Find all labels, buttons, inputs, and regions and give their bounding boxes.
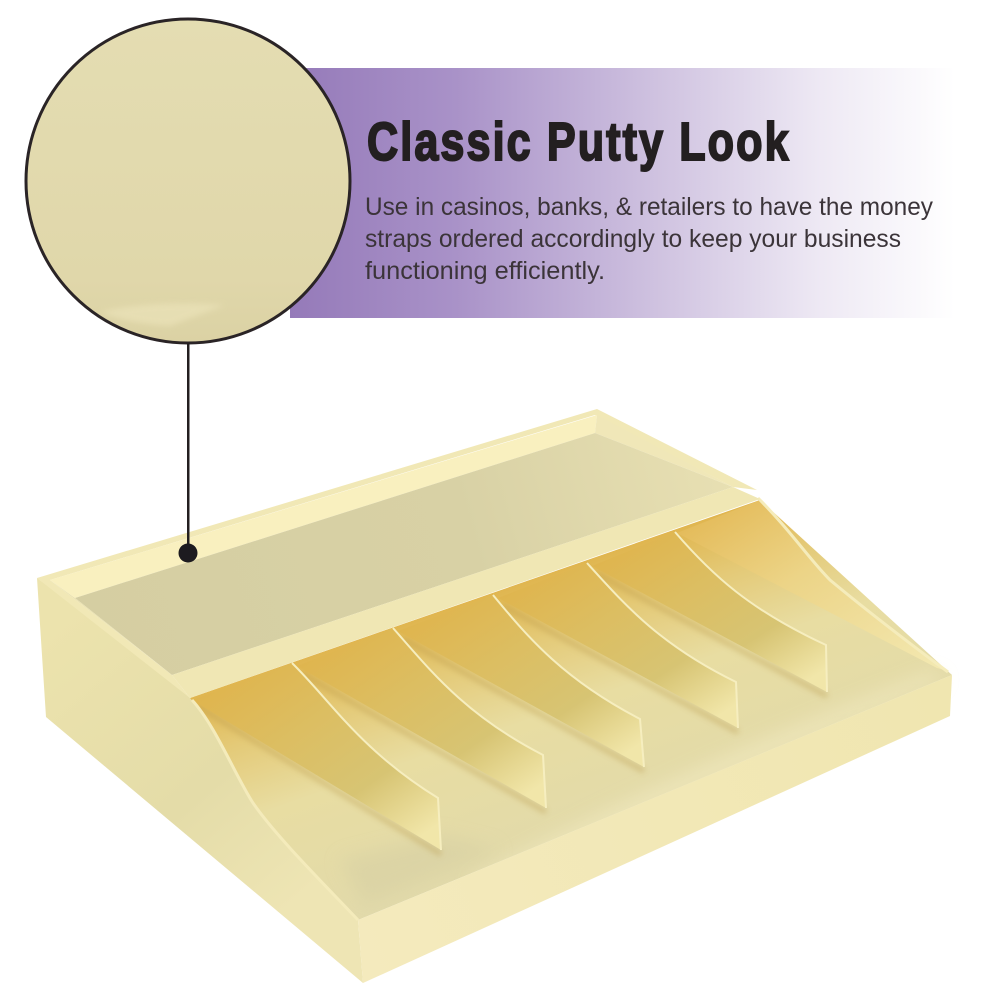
divider 2 edge bbox=[393, 628, 546, 808]
divider base shadows bbox=[197, 574, 827, 854]
description text: straps ordered accordingly to keep your business bbox=[365, 225, 901, 253]
description text: Use in casinos, banks, & retailers to have the money bbox=[365, 193, 933, 221]
divider 1 edge bbox=[292, 663, 441, 850]
shelf front strip bbox=[172, 487, 760, 698]
divider 2 bbox=[297, 628, 546, 808]
upper shelf right inner wall bbox=[595, 415, 733, 487]
product: putty money strap tray bbox=[37, 409, 952, 983]
description text bbox=[365, 193, 933, 285]
magnified texture circle bbox=[26, 19, 350, 343]
divider 5 bbox=[592, 532, 827, 692]
callout leader line with dot bbox=[178, 343, 198, 562]
top rim bbox=[37, 409, 757, 698]
tray floor bbox=[190, 500, 952, 920]
divider 4 bbox=[498, 563, 738, 728]
left side panel bbox=[37, 578, 363, 983]
divider 3 bbox=[398, 595, 644, 767]
divider 5 edge bbox=[675, 532, 827, 692]
left ramp edge highlight bbox=[192, 700, 358, 920]
purple gradient banner bbox=[290, 68, 955, 318]
upper shelf inner wall bbox=[50, 415, 597, 598]
divider 4 edge bbox=[587, 563, 738, 728]
right ramp wall bbox=[677, 500, 945, 670]
floor front-left shade bbox=[340, 835, 500, 905]
divider 1 bbox=[192, 663, 441, 850]
title: Classic Putty Look bbox=[367, 113, 789, 172]
upper shelf surface bbox=[75, 433, 733, 675]
front lip bbox=[358, 675, 952, 983]
left inner wall of shelf bbox=[50, 580, 172, 675]
divider 3 edge bbox=[493, 595, 644, 767]
description text: functioning efficiently. bbox=[365, 257, 605, 285]
floor front highlight bbox=[470, 672, 945, 890]
right ramp edge bbox=[758, 498, 948, 672]
